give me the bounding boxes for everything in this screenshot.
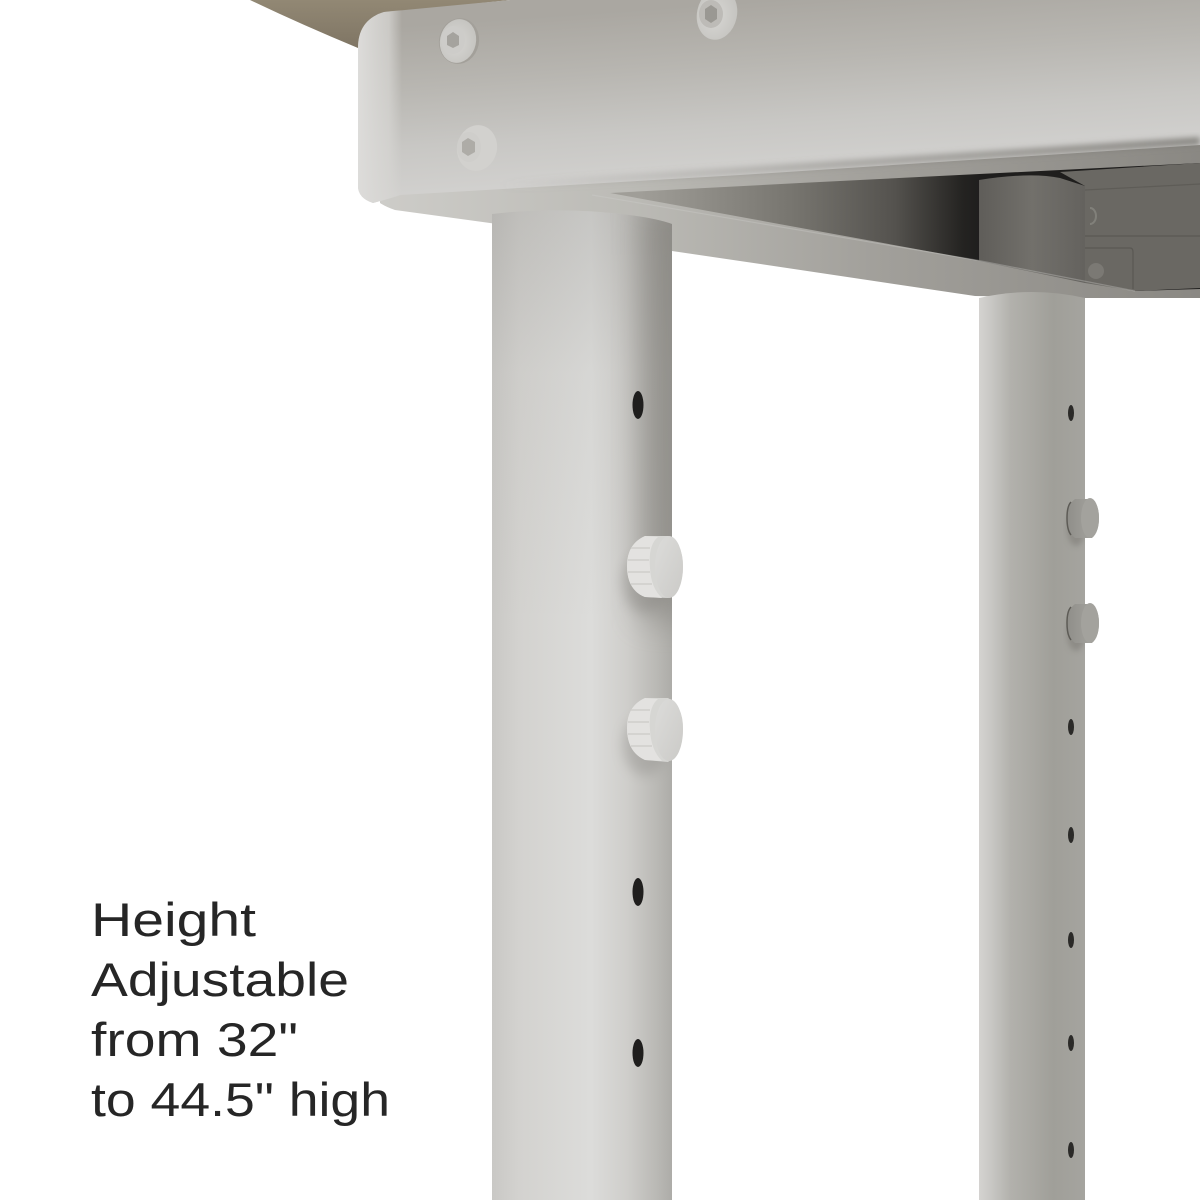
front leg holes [632, 391, 644, 1067]
screw: top left [435, 14, 483, 68]
front apron beam [358, 0, 1200, 203]
front leg [492, 200, 690, 1200]
rear leg [979, 292, 1099, 1200]
dark recess behind strut [610, 163, 1200, 291]
caption: height adjustable: from 32" [91, 1013, 298, 1066]
caption: height adjustable: to 44.5" high [91, 1073, 390, 1126]
caption: height adjustable: Height [91, 893, 256, 946]
screw: top centre [692, 0, 742, 44]
rear leg holes [1068, 405, 1074, 1158]
right bracket area [1060, 163, 1200, 291]
rear leg knob upper [1067, 498, 1099, 546]
rear column top [979, 175, 1085, 283]
caption: height adjustable: Adjustable [91, 953, 349, 1006]
table top wood edge [250, 0, 510, 48]
front leg knob upper [623, 536, 683, 612]
under-frame of the table [380, 130, 1200, 298]
rear leg knob lower [1067, 603, 1099, 651]
caption: height adjustable [91, 893, 390, 1126]
front leg knob lower [623, 698, 683, 775]
screw: lower [453, 121, 501, 175]
lip and diagonal strut [380, 130, 1200, 298]
